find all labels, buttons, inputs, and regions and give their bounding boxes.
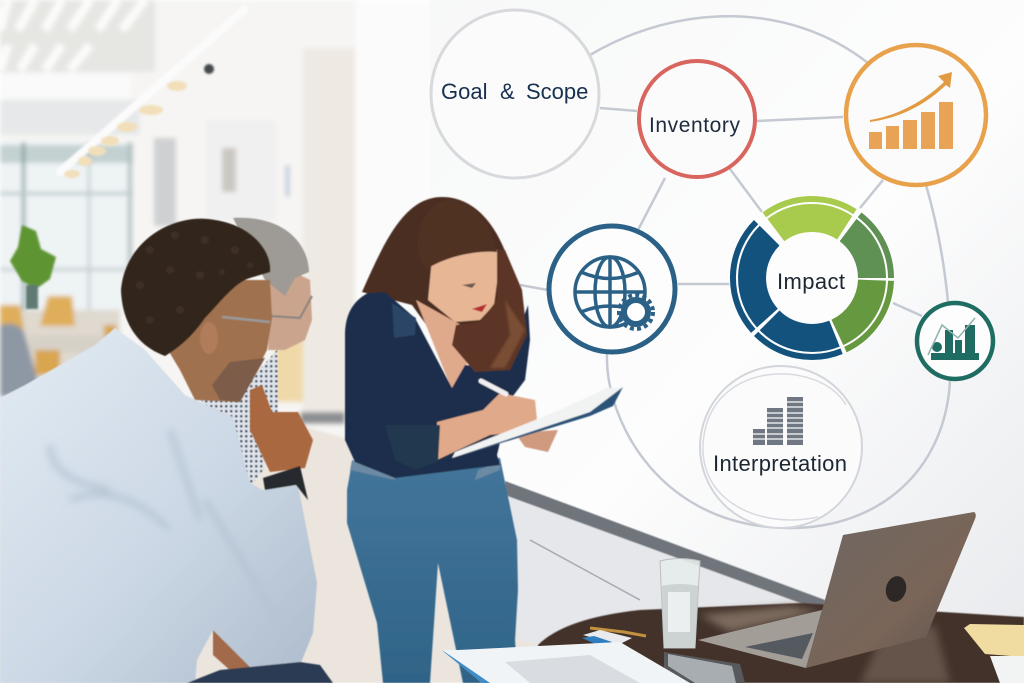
round table: [538, 603, 1024, 683]
hair curls: [136, 231, 253, 324]
laptop: [698, 512, 976, 668]
segment: blue left: [733, 222, 770, 331]
yellow notepad: [964, 624, 1024, 657]
forearm and hand: [437, 393, 537, 460]
jeans: [347, 458, 518, 683]
ear: [200, 322, 218, 354]
ceiling light rail: [60, 9, 245, 178]
stacked bars icon: [753, 397, 803, 445]
neck and chest: [416, 300, 470, 390]
keyboard: [745, 633, 813, 659]
water glass: [660, 558, 700, 648]
fist: [250, 385, 313, 472]
gear: [624, 300, 648, 324]
face: [428, 248, 498, 322]
blouse: [345, 292, 530, 478]
shirt shading: [50, 430, 290, 640]
diagram connectors: [520, 16, 950, 528]
trousers: [187, 662, 333, 683]
eye: [462, 283, 476, 288]
hair back: [362, 197, 522, 340]
plant: [10, 225, 56, 309]
document on table: [442, 642, 690, 683]
clipboard: [452, 388, 623, 458]
node: Interpretation: [700, 366, 862, 528]
laptop base: [698, 610, 822, 668]
beard shadow: [212, 358, 265, 402]
hair: [233, 218, 309, 296]
hair lock right: [452, 250, 527, 372]
floor: [0, 400, 825, 683]
table reflection: [700, 606, 950, 683]
node: Impact donut chart: [729, 195, 895, 361]
bars: [869, 102, 953, 149]
checked shirt: [200, 350, 278, 488]
neck and face: [165, 280, 272, 402]
waistband: [350, 460, 500, 480]
person: woman: [345, 197, 623, 683]
person: older man: [200, 218, 312, 488]
globe: [575, 257, 645, 327]
collar: [392, 303, 416, 338]
arrow: [870, 72, 952, 122]
lower hand: [213, 630, 250, 672]
laptop lid: [806, 512, 976, 668]
pen and sticky notes on table: [582, 628, 646, 646]
baseboard: [505, 481, 825, 612]
label: Interpretation: Interpretation: [713, 451, 847, 476]
segment: light green: [764, 199, 855, 230]
label: Goal & Scope: Scope: [526, 79, 588, 104]
face: [268, 260, 312, 350]
lower hand: [515, 430, 558, 452]
node: Goal & Scope: [431, 10, 599, 178]
background: blurred office interior: [0, 0, 440, 683]
watch: [263, 466, 308, 500]
pen: [481, 381, 506, 394]
node: Inventory: [639, 61, 755, 177]
segment: mid green: [848, 215, 891, 278]
hair highlight: [490, 300, 525, 368]
white paper right: [990, 656, 1024, 683]
wall panel: [430, 0, 1024, 617]
segment: blue lower: [756, 320, 842, 357]
phone: [664, 652, 745, 683]
glasses: [270, 296, 312, 318]
segment: olive green: [837, 280, 891, 350]
person: man in foreground: [0, 219, 333, 683]
hair: [121, 219, 270, 356]
label: Goal & Scope: &: [500, 79, 515, 104]
node: growth chart icon: [846, 45, 986, 185]
hair front: [418, 200, 497, 268]
node: small teal chart icon: [917, 303, 993, 379]
glasses: [222, 317, 270, 322]
sleeve cuff: [385, 425, 440, 470]
label: Inventory: Inventory: [649, 114, 740, 137]
logo: [883, 574, 909, 604]
node: globe with gear: [549, 226, 675, 352]
label: Impact: Impact: [777, 269, 845, 294]
lips: [472, 304, 487, 312]
label: Goal & Scope: Goal: [441, 79, 487, 104]
shirt: [0, 328, 317, 683]
